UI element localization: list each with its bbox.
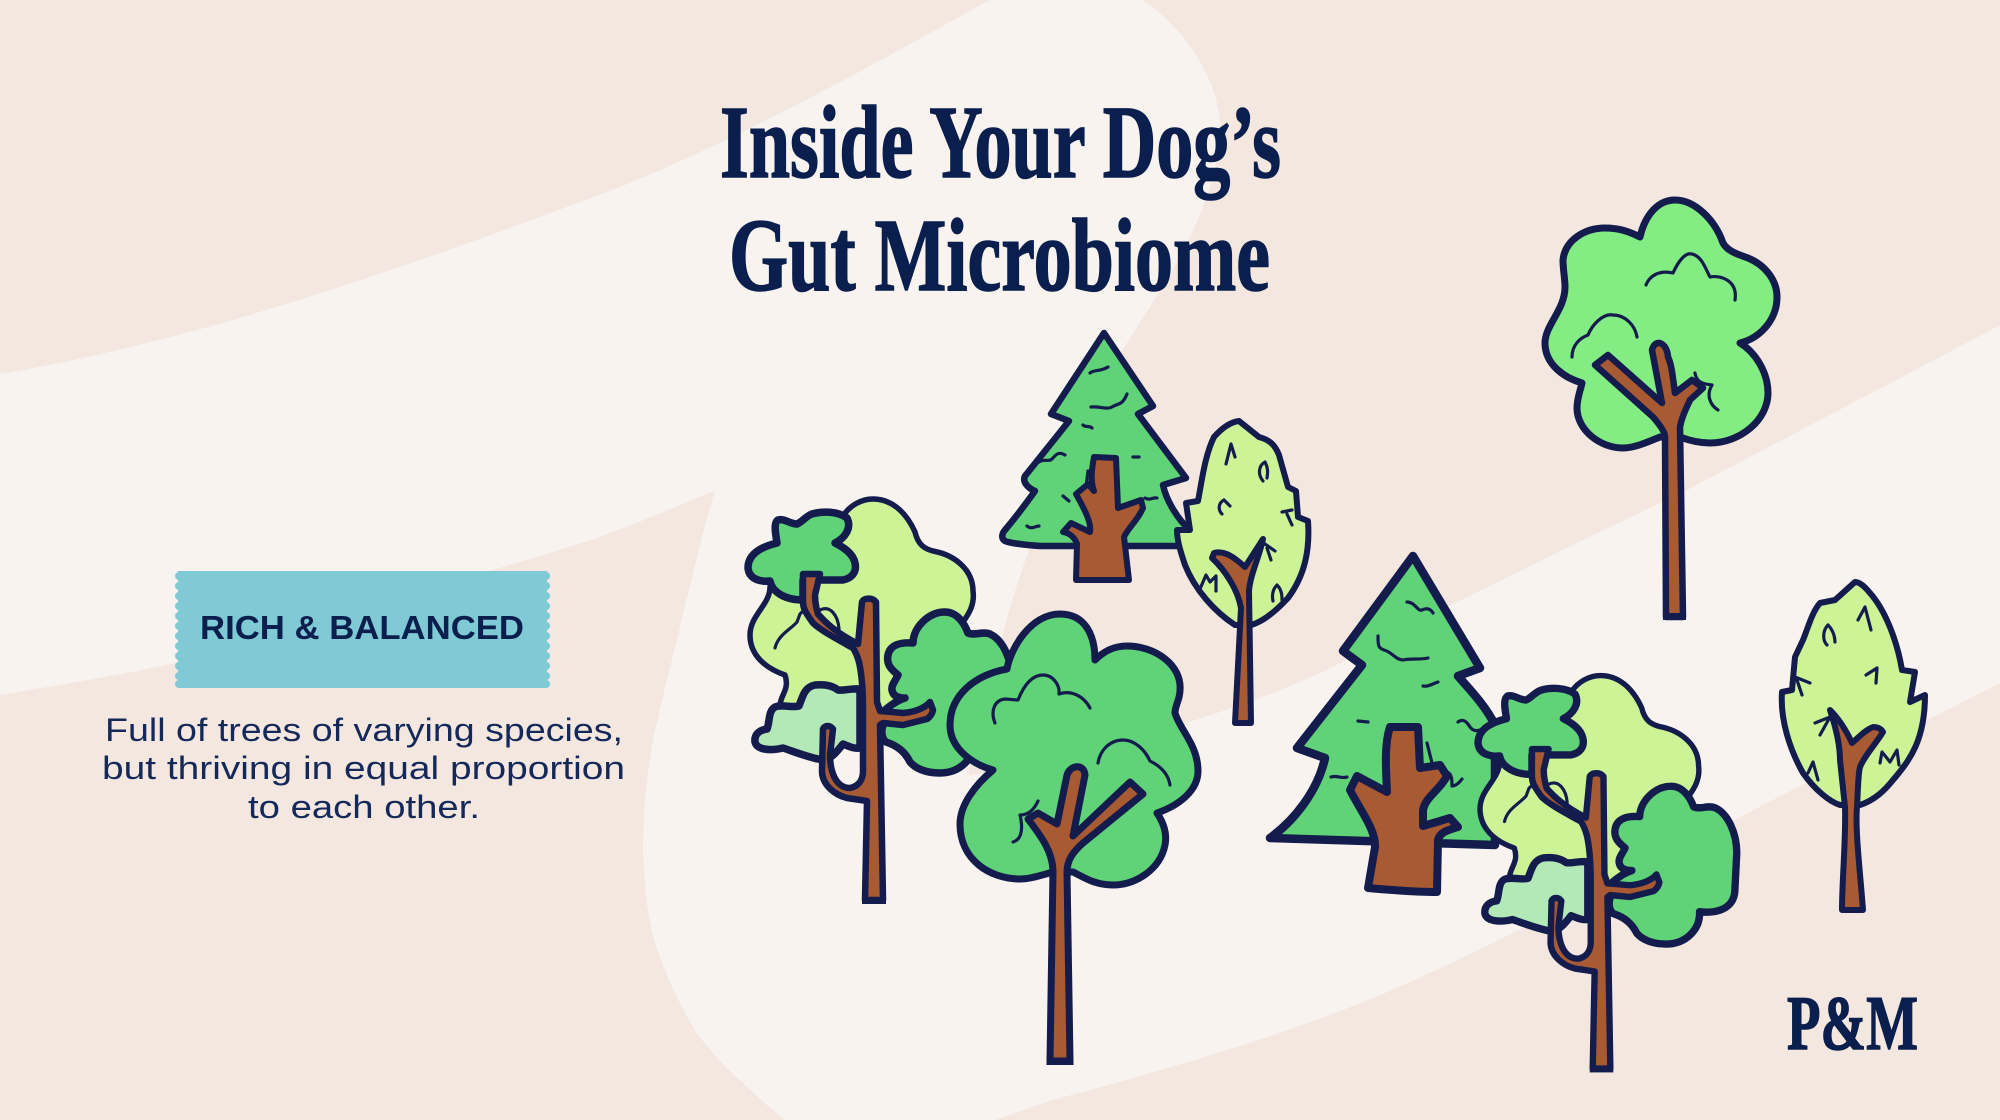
badge: rich and balanced: RICH & BALANCED (200, 609, 524, 646)
tree: right lime leaf (1782, 582, 1925, 910)
title: Gut Microbiome (729, 198, 1270, 313)
description text (102, 712, 625, 825)
tree: top right bright green (1545, 200, 1777, 620)
tree: layered left tree (748, 499, 1012, 904)
tree: small conifer (1002, 333, 1190, 580)
description text: Full of trees of varying species, (105, 712, 623, 748)
tree: layered right tree (1478, 676, 1737, 1072)
title (720, 85, 1281, 313)
title: Inside Your Dog’s (720, 85, 1281, 200)
tree: large conifer (1270, 556, 1495, 892)
badge: rich and balanced (175, 571, 550, 688)
description text: to each other. (248, 789, 480, 825)
tree: large front tree (950, 614, 1198, 1065)
tree: small lime leaf (1177, 421, 1308, 723)
logo: P&M: P&M (1787, 980, 1918, 1066)
description text: but thriving in equal proportion (102, 750, 625, 786)
